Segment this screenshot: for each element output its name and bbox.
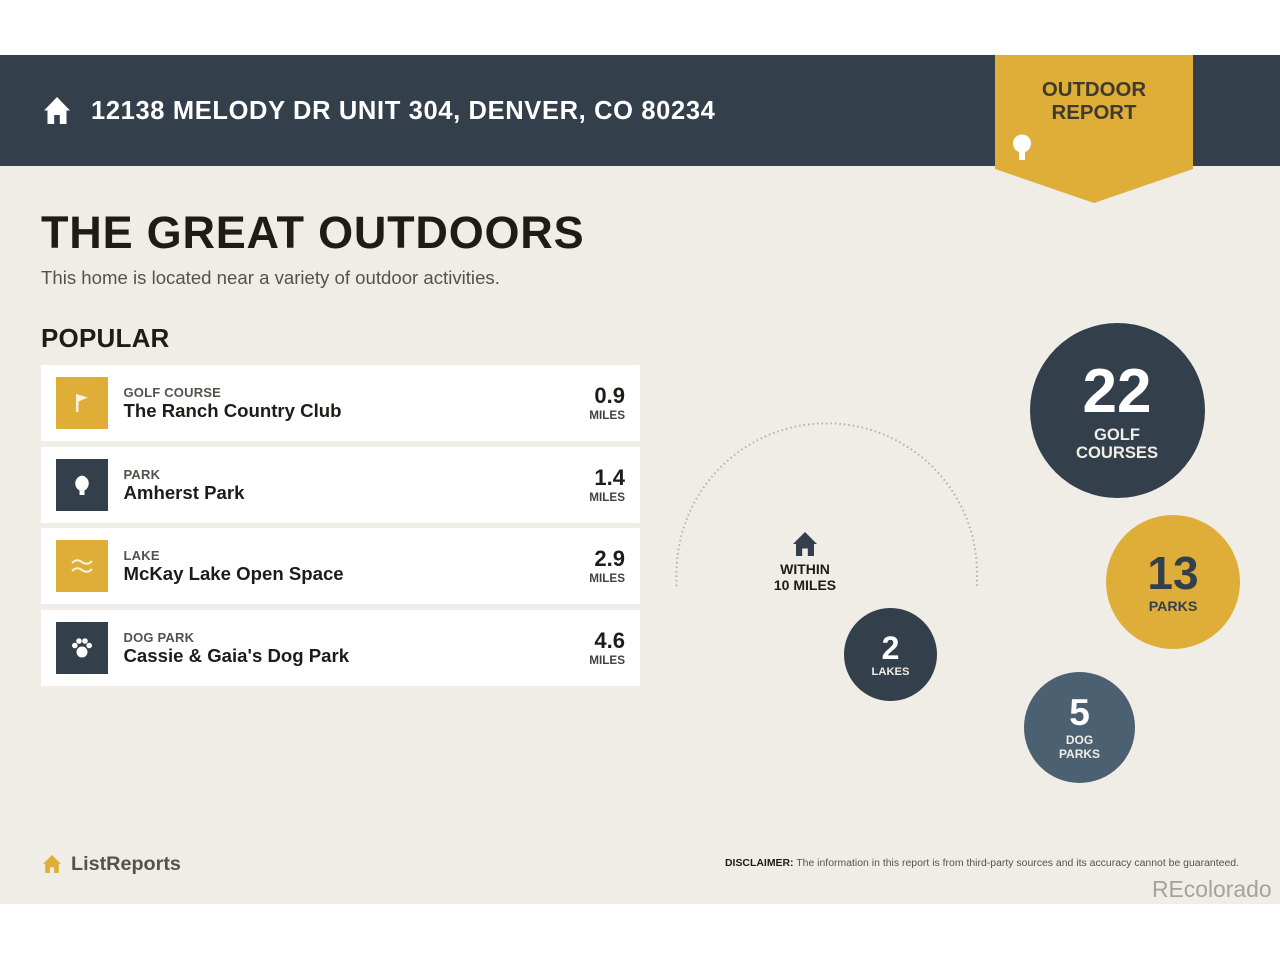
distance: 1.4 xyxy=(594,464,625,490)
place name: Cassie & Gaia's Dog Park xyxy=(124,644,349,666)
count: 5 xyxy=(1069,692,1090,733)
type label: DOG PARK xyxy=(124,630,194,644)
count: 13 xyxy=(1147,547,1199,599)
icon: home xyxy=(43,855,61,873)
unit: MILES xyxy=(589,409,625,422)
unit: MILES xyxy=(589,572,625,585)
heading: popular: POPULAR xyxy=(41,323,170,353)
icon: tree xyxy=(1012,134,1032,160)
dotted radius arc xyxy=(676,422,978,586)
list row: park xyxy=(41,446,640,522)
label: PARKS xyxy=(1059,746,1100,760)
type label: LAKE xyxy=(124,548,160,563)
brand name: ListReports xyxy=(71,853,181,875)
disclaimer: DISCLAIMER: The information in this report is from third-party sources and its accuracy cannot be guaranteed. xyxy=(725,858,1239,868)
radius label: 10 MILES xyxy=(774,576,836,592)
label xyxy=(1076,424,1158,462)
title: THE GREAT OUTDOORS xyxy=(41,207,584,258)
stat circle: lakes xyxy=(844,608,937,701)
unit: MILES xyxy=(589,490,625,504)
label: GOLF xyxy=(1094,424,1140,444)
stat circle: dog parks xyxy=(1024,672,1135,783)
unit: MILES xyxy=(589,654,625,666)
radius label xyxy=(774,560,836,592)
icon: tree xyxy=(56,458,108,510)
distance: 2.9 xyxy=(594,546,625,571)
stat circle: parks xyxy=(1106,515,1240,649)
icon: home xyxy=(44,97,70,124)
badge: outdoor report xyxy=(995,55,1193,203)
list row: lake xyxy=(41,528,640,604)
center label: within 10 miles xyxy=(774,532,836,592)
icon: paw xyxy=(56,622,108,674)
icon: waves xyxy=(56,540,108,592)
badge shape xyxy=(995,55,1193,203)
radius label: WITHIN xyxy=(780,560,830,576)
label xyxy=(1059,733,1100,760)
label: COURSES xyxy=(1076,443,1158,462)
label: LAKES xyxy=(872,666,909,678)
icon: flag xyxy=(56,377,108,429)
count: 2 xyxy=(882,630,899,666)
badge label: REPORT xyxy=(1052,102,1136,124)
stat circle: golf courses xyxy=(1030,323,1205,498)
type label: GOLF COURSE xyxy=(124,385,221,400)
distance: 4.6 xyxy=(594,628,625,652)
subtitle: This home is located near a variety of outdoor activities. xyxy=(41,267,500,288)
list row: golf course xyxy=(41,365,640,441)
type label: PARK xyxy=(124,466,160,482)
distance: 0.9 xyxy=(594,383,625,408)
place name: Amherst Park xyxy=(124,482,244,502)
label: PARKS xyxy=(1149,598,1197,614)
address: 12138 MELODY DR UNIT 304, DENVER, CO 80234 xyxy=(91,96,715,124)
place name: The Ranch Country Club xyxy=(124,400,341,421)
watermark: REcolorado xyxy=(1152,876,1272,902)
page background panel xyxy=(0,165,1280,904)
place name: McKay Lake Open Space xyxy=(124,563,344,584)
badge label: OUTDOOR xyxy=(1042,79,1146,101)
count: 22 xyxy=(1083,357,1151,426)
badge label xyxy=(1042,79,1146,124)
header bar xyxy=(0,55,1280,166)
footer logo xyxy=(43,853,181,875)
label: DOG xyxy=(1066,733,1093,747)
icon: home xyxy=(793,532,817,556)
list row: dog park xyxy=(41,610,640,686)
